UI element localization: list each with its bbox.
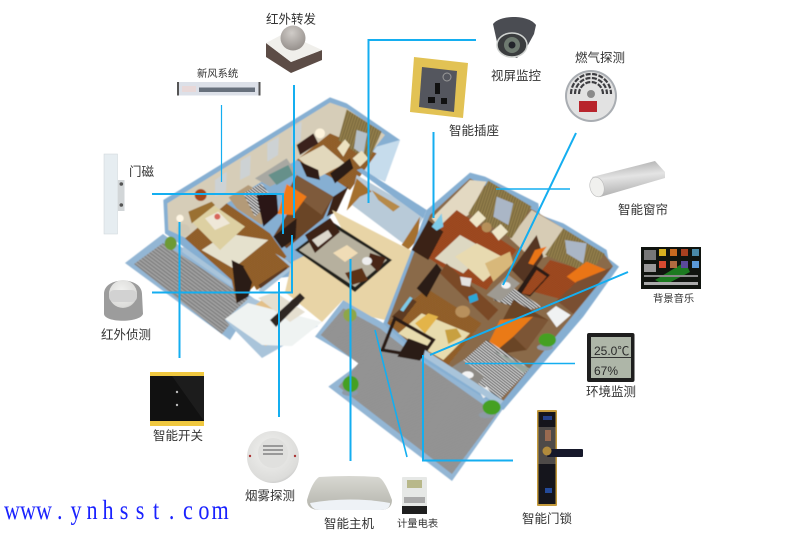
- central brown block: [273, 175, 333, 248]
- label: ir transmitter: 红外转发: [266, 12, 317, 26]
- device: smoke detector: [247, 431, 299, 483]
- big bathroom stripes: [460, 340, 530, 403]
- line: ir transmitter: [293, 85, 295, 218]
- device: smart switch: [150, 372, 204, 426]
- device: fresh air system: [177, 82, 260, 96]
- label: curtain: 智能窗帘: [618, 202, 668, 217]
- bathroom stripes left: [229, 185, 273, 225]
- label: gas: 燃气探测: [575, 50, 625, 65]
- orange room: [278, 184, 307, 215]
- label: smart switch: 智能开关: [153, 428, 203, 443]
- back wall: [167, 103, 385, 238]
- line: host: [350, 259, 352, 461]
- long desk: [440, 263, 498, 321]
- right wing: [342, 173, 619, 418]
- left wing outer walls: [163, 97, 400, 283]
- living room curtain wall: [350, 175, 425, 246]
- top bedroom curtain: [338, 109, 382, 162]
- curtain top room: [468, 181, 532, 238]
- device: power meter: [402, 477, 427, 514]
- top bedroom bed: [298, 145, 345, 177]
- central block right: [483, 300, 548, 357]
- left bedroom floor: [185, 203, 287, 303]
- line: meter: [375, 330, 407, 457]
- rug and bed: [435, 235, 487, 273]
- website url: www.ynhsst.com: [4, 496, 229, 526]
- label: socket: 智能插座: [449, 123, 499, 138]
- bottom right outer wall: [423, 350, 505, 408]
- label: environment: 环境监测: [586, 384, 636, 399]
- device: environment monitor: [587, 333, 634, 382]
- coffee table: [333, 245, 358, 262]
- right wing outer walls: [383, 173, 619, 410]
- line: gas detector: [503, 133, 576, 285]
- plants: [342, 308, 556, 418]
- line: door lock: [423, 355, 513, 460]
- bathroom counter upper: [487, 275, 520, 302]
- device: curtain motor: [588, 161, 665, 198]
- line: smoke detector: [278, 282, 280, 417]
- armchairs: [368, 253, 386, 272]
- label: music: 背景音乐: [653, 292, 694, 305]
- chairs: [337, 139, 350, 157]
- plant left: [165, 237, 177, 250]
- door lower: [382, 318, 433, 357]
- top bedroom floor: [297, 133, 377, 190]
- line: environment monitor: [465, 362, 575, 364]
- right wing floor base: [387, 178, 613, 405]
- small stripes: [493, 288, 542, 311]
- dark side table: [232, 260, 255, 303]
- staircase: [225, 292, 322, 358]
- label: meter: 计量电表: [397, 517, 438, 530]
- label: ir detector: 红外侦测: [101, 327, 151, 342]
- device: ir detector: [104, 280, 143, 321]
- label: door lock: 智能门锁: [522, 511, 573, 526]
- line: smart switch: [178, 222, 180, 358]
- device: ir transmitter: [266, 26, 322, 73]
- line: socket: [432, 132, 434, 218]
- connector lines: [152, 40, 628, 461]
- brown partition: [327, 187, 348, 217]
- back wall right: [432, 180, 487, 232]
- device: smart socket: [410, 57, 468, 118]
- label: smoke: 烟雾探测: [245, 489, 295, 503]
- tub: [547, 306, 571, 327]
- line: curtain: [496, 188, 570, 190]
- label: fresh air: 新风系统: [197, 67, 238, 80]
- door top: [417, 263, 442, 297]
- bed left: [192, 205, 245, 250]
- line: background music: [430, 272, 628, 355]
- device: door lock: [537, 410, 583, 506]
- device: gas detector: [565, 70, 617, 122]
- left wing: [163, 97, 427, 303]
- device: dome camera: [493, 17, 536, 58]
- device: environment monitor: 25.0℃: [594, 344, 629, 358]
- sink counter: [450, 360, 484, 387]
- bedside table and lamp: [177, 224, 190, 236]
- right room floor: [527, 260, 602, 302]
- line: door sensor: [152, 194, 283, 234]
- top room floor: [415, 210, 517, 290]
- line: ir detector: [152, 235, 292, 292]
- left balcony: [125, 234, 256, 340]
- sofa: [305, 218, 340, 253]
- floor plan: 3D house: [125, 97, 619, 481]
- window panels: [215, 122, 302, 197]
- label: host: 智能主机: [324, 516, 375, 531]
- orange furniture right: [567, 262, 607, 291]
- living floor: [285, 210, 432, 322]
- device: background music screen: [641, 247, 701, 289]
- device: environment monitor: 67%: [594, 364, 618, 378]
- device: door sensor: [104, 154, 124, 234]
- living rug: [295, 222, 392, 292]
- label: camera: 视屏监控: [491, 68, 542, 83]
- side desk dark: [412, 220, 443, 260]
- label: door sensor: 门磁: [129, 164, 155, 179]
- bedside lower: [392, 298, 417, 323]
- lower balcony: [315, 300, 503, 481]
- line: camera: [368, 40, 476, 203]
- line: fresh air system: [220, 105, 222, 182]
- living room: [285, 210, 432, 322]
- rug: [202, 233, 268, 268]
- lower bedroom floor: [387, 288, 482, 367]
- wall art: [195, 189, 207, 201]
- chairs top room: [469, 211, 486, 227]
- device: smart host: [307, 476, 392, 510]
